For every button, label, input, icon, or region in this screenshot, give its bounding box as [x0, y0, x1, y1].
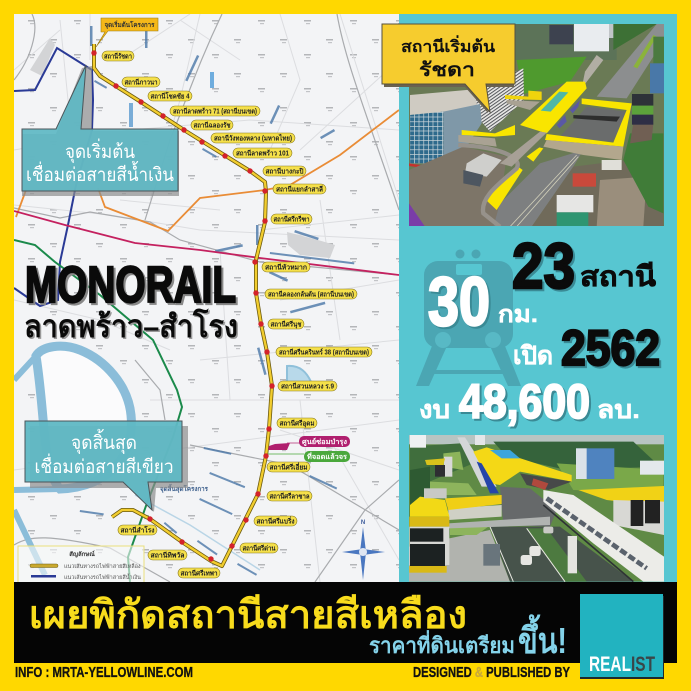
station labels: สถานีลาดพร้าว 71 (สถานีบนเขต) [173, 106, 257, 116]
station labels: สถานีรัชดา [104, 52, 132, 60]
yellow line route [94, 44, 272, 566]
stat: 23 stations [512, 230, 656, 304]
red line [14, 211, 399, 275]
train [543, 490, 664, 582]
subtitle: Lat Phrao - Samrong: ลาดพร้าว–สำโรง [26, 310, 240, 346]
station labels: สถานีฉลองรัช [194, 122, 231, 130]
stat: opens 2562: เปิด [513, 342, 553, 370]
subtitle: Lat Phrao - Samrong: ลาดพร้าว–สำโรง [24, 308, 238, 344]
blue street labels [80, 26, 354, 576]
stat: opens 2562: 2562 [561, 320, 660, 376]
subheadline: ราคาที่ดินเตรียม [369, 629, 515, 658]
callout station name: รัชดา [419, 60, 475, 81]
station yellow roof [520, 82, 587, 133]
canal [135, 495, 260, 570]
station labels: สถานีโชคชัย 4 [150, 92, 190, 100]
station labels [102, 51, 372, 578]
station roof [473, 447, 572, 485]
park and ride label: ที่จอดแล้วจร [307, 451, 347, 461]
logo: REALIST: REALIST [589, 653, 655, 676]
bottom left roofs [409, 147, 507, 227]
headline: เผยพิกัดสถานีสายสีเหลือง [29, 594, 467, 637]
station labels: สถานีสวนหลวง ร.9 [281, 382, 334, 390]
stat: 23 stations: 23 [512, 230, 575, 302]
station labels: สถานีคลองกลันตัน (สถานีบนเขต) [268, 290, 354, 298]
station labels: สถานีศรีแบริ่ง [256, 516, 295, 526]
legend: แนวเส้นทางรถไฟฟ้าสายสีเหลือง [64, 563, 141, 570]
end of project text: จุดสิ้นสุดโครงการ [160, 483, 208, 493]
photo: Ratchada station aerial view [409, 23, 666, 227]
walkways yellow [545, 98, 632, 147]
train icon windows and lights [435, 264, 501, 348]
station labels: สถานีลาดพร้าว 101 [236, 148, 289, 158]
stat: budget 48,600: ลบ. [597, 396, 640, 424]
station labels: สถานีศรีกรีฑา [274, 216, 310, 224]
station labels: สถานีศรีลาซาล [270, 492, 310, 500]
station labels: สถานีศรีอุดม [280, 420, 315, 428]
stat: 30 km [428, 263, 538, 342]
compass icon: N [361, 520, 365, 526]
callout heading: สถานีเริ่มต้น [401, 35, 495, 56]
station labels: สถานีภาวนา [124, 78, 158, 86]
stat: 30 km: กม. [498, 301, 538, 327]
station body [500, 487, 557, 527]
river branches [14, 356, 60, 575]
station labels: สถานีวังทองหลาง (มหาดไทย) [214, 134, 292, 142]
station labels: สถานีศรีเอี่ยม [270, 462, 308, 472]
callout line 2: เชื่อมต่อสายสีน้ำเงิน [26, 161, 174, 186]
legend: สัญลักษณ์ [69, 550, 95, 558]
stat: 23 stations: 23 [514, 232, 577, 304]
river [36, 346, 131, 489]
ground [409, 530, 510, 582]
legend [18, 546, 144, 582]
grey park block [30, 38, 55, 76]
building group left [473, 68, 524, 132]
compass icon [342, 520, 385, 580]
station labels: สถานีสำโรง [120, 526, 155, 534]
footer: credit: DESIGNED & PUBLISHED BY [413, 664, 570, 681]
title: MONORAIL: MONORAIL [27, 258, 238, 315]
station labels: สถานีศรีนครินทร์ 38 (สถานีบนเขต) [279, 348, 369, 356]
callout: blue line connection [22, 65, 179, 196]
lower right blocks [532, 160, 663, 227]
callout line 1: จุดเริ่มต้น [65, 138, 135, 164]
legend: แนวเส้นทางรถไฟฟ้าสายสีน้ำเงิน [64, 573, 141, 581]
stat: 23 stations: สถานี [580, 261, 656, 292]
road lower [493, 150, 583, 227]
panel: teal stats background [399, 14, 677, 582]
right station [578, 486, 664, 502]
banner: black headline band [14, 582, 677, 663]
station labels: สถานีแยกลำสาลี [276, 186, 323, 194]
station labels: สถานีทิพวัล [150, 552, 184, 560]
pond [287, 366, 312, 384]
guideway [458, 145, 518, 227]
right building and trees [623, 133, 663, 213]
blue line [14, 48, 93, 306]
callout line 1: จุดสิ้นสุด [71, 429, 137, 455]
photo: monorail station render [409, 435, 666, 582]
left walkway [445, 495, 502, 510]
callout line 2: เชื่อมต่อสายสีเขียว [34, 453, 174, 478]
stat: budget 48,600: งบ [419, 396, 450, 424]
stat: 30 km: 30 [430, 265, 492, 342]
station labels: สถานีศรีด่าน [242, 544, 276, 552]
stat: budget 48,600: 48,600 [459, 376, 590, 429]
grey park block east [287, 232, 335, 258]
subheadline emphasis: ขึ้น! [518, 614, 567, 661]
logo: REALIST [580, 594, 664, 679]
station labels: สถานีบางกะปิ [266, 168, 304, 176]
icon: train silhouette [416, 250, 521, 386]
panel: route map [14, 14, 399, 591]
stat: opens 2562 [513, 320, 662, 378]
station labels: สถานีศรีนุช [270, 320, 302, 328]
park and ride label [268, 451, 350, 462]
project start tag [96, 18, 158, 47]
stat: opens 2562: 2562 [563, 322, 662, 378]
stat: budget 48,600: 48,600 [461, 378, 592, 431]
orange line [16, 110, 399, 231]
station labels: สถานีศรีเทพา [180, 570, 218, 578]
underpass [560, 107, 627, 142]
green line [14, 240, 182, 582]
stat: 30 km: 30 [428, 263, 490, 340]
stat: budget 48,600 [419, 376, 640, 431]
project start tag: จุดเริ่มต้นโครงการ [104, 19, 155, 29]
title: MONORAIL: MONORAIL [25, 256, 236, 313]
callout: green line connection [25, 421, 188, 512]
depot label: ศูนย์ซ่อมบำรุง [302, 437, 348, 447]
footer: source: INFO : MRTA-YELLOWLINE.COM [15, 664, 193, 681]
station markers [91, 50, 275, 562]
depot label [268, 436, 350, 450]
station labels: สถานีหัวหมาก [265, 264, 307, 272]
callout: start station [382, 24, 515, 113]
